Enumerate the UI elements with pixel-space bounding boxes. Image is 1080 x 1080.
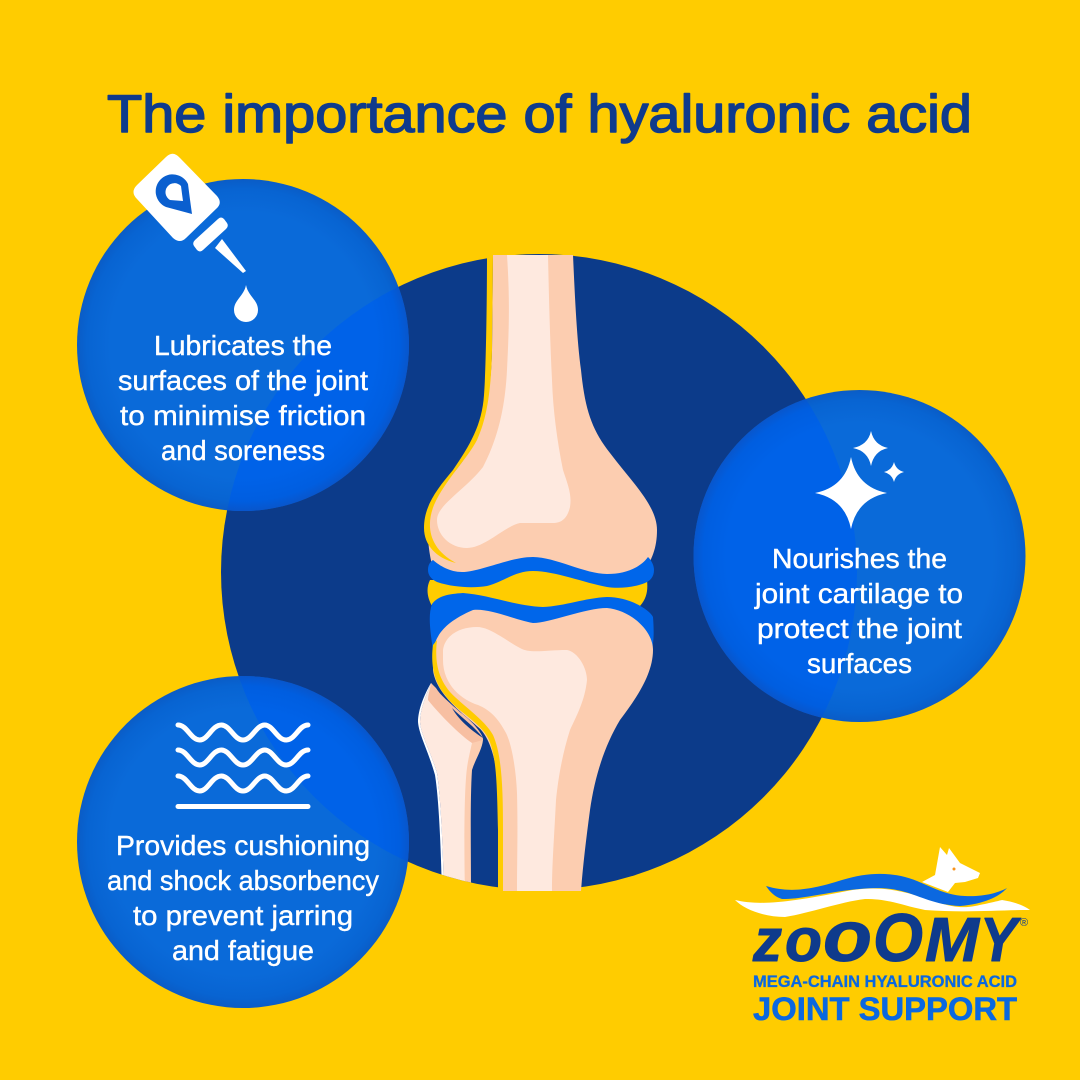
logo dog [922, 847, 980, 892]
logo wordmark: O [873, 900, 923, 976]
logo wordmark: o [785, 906, 822, 974]
logo wordmark: M [925, 906, 980, 975]
logo blue wave [766, 874, 1007, 906]
text: lubricates: and soreness [161, 435, 325, 466]
text: lubricates [118, 330, 368, 466]
cartilage: lower blue band [430, 593, 654, 650]
cartilage: upper blue band [428, 557, 654, 588]
fibula bone [418, 683, 483, 895]
text: nourishes: protect the joint [757, 613, 962, 644]
illustration: knee joint [418, 255, 657, 895]
navy background circle [221, 254, 857, 890]
circle panel: nourishes [694, 390, 1026, 722]
circle panel: lubricates [77, 154, 409, 511]
icon: waves [178, 725, 308, 806]
logo wordmark: Y [980, 906, 1022, 975]
text: nourishes: joint cartilage to [754, 578, 963, 609]
text: cushioning: Provides cushioning [116, 830, 370, 861]
logo wordmark: o [823, 898, 872, 977]
logo wordmark [752, 898, 1022, 977]
text: lubricates: to minimise friction [120, 400, 366, 431]
logo registered mark: ® [1020, 917, 1028, 929]
logo wordmark: z [752, 907, 782, 974]
icon: bottle with drop [134, 154, 258, 322]
logo subtitle: MEGA-CHAIN HYALURONIC ACID [753, 973, 1017, 991]
icon: sparkles [815, 431, 904, 529]
text: cushioning: and fatigue [172, 935, 314, 966]
text: cushioning [107, 830, 379, 966]
text: cushioning: to prevent jarring [133, 900, 353, 931]
text: cushioning: and shock absorbency [107, 865, 379, 896]
synovial fluid: yellow band [428, 565, 647, 612]
text: nourishes: Nourishes the [772, 543, 947, 574]
logo white wave [735, 888, 1030, 917]
text: lubricates: surfaces of the joint [118, 365, 368, 396]
circle panel: cushioning [77, 676, 409, 1008]
title: The importance of hyaluronic acid [107, 85, 972, 144]
femur bone [424, 255, 657, 580]
text: nourishes [754, 543, 963, 679]
text: nourishes: surfaces [807, 648, 912, 679]
logo: Zooomy joint support [735, 847, 1030, 1027]
text: lubricates: Lubricates the [154, 330, 332, 361]
logo joint support: JOINT SUPPORT [753, 991, 1017, 1027]
tibia bone [432, 608, 653, 891]
